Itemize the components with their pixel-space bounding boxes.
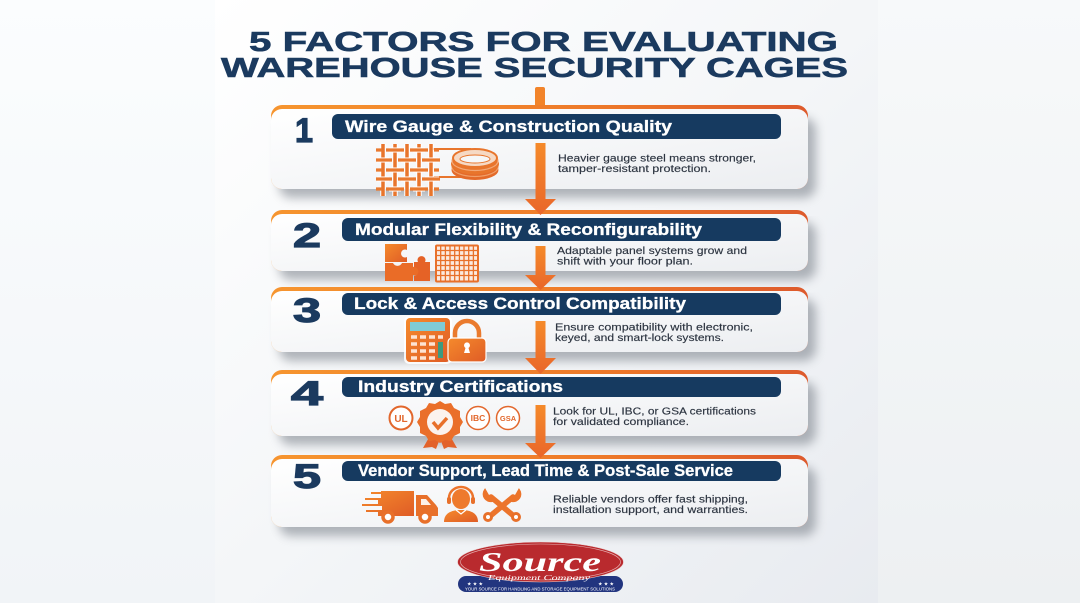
heading bar 4 — [342, 377, 781, 397]
description 2 — [557, 245, 747, 268]
panel: factor 5 — [271, 455, 816, 536]
heading bar 3 — [342, 293, 781, 315]
icon: support agent — [444, 487, 478, 522]
icon: certification badges: GSA — [500, 414, 517, 423]
heading bar 2: Modular Flexibility & Reconfigurability — [355, 221, 703, 239]
description 3 — [555, 322, 753, 344]
arrow 4 to 5 — [525, 405, 556, 458]
description 3: Ensure compatibility with electronic, — [555, 322, 753, 334]
logo: Source Equipment Company: YOUR SOURCE FOR HANDLING AND STORAGE EQUIPMENT SOLUTIONS — [465, 586, 615, 592]
number 1: 1 — [295, 112, 313, 150]
number 2: 2 — [293, 217, 321, 255]
heading bar 1: Wire Gauge & Construction Quality — [345, 118, 673, 136]
top connector — [535, 87, 545, 107]
description 1 — [558, 152, 756, 175]
description 2: Adaptable panel systems grow and — [557, 245, 747, 257]
panel: factor 4 — [271, 370, 816, 449]
description 1: tamper-resistant protection. — [558, 163, 711, 175]
title: 5 FACTORS FOR EVALUATING — [249, 26, 838, 57]
icon: certification badges — [390, 401, 520, 449]
description 4: for validated compliance. — [553, 416, 689, 428]
icon: wire mesh and coil — [376, 144, 498, 196]
description 4: Look for UL, IBC, or GSA certifications — [553, 406, 756, 418]
icon: delivery truck — [362, 491, 438, 522]
description 3: keyed, and smart-lock systems. — [555, 332, 724, 344]
icon: keypad and padlock — [404, 316, 486, 364]
logo: Source Equipment Company: Source — [479, 547, 601, 577]
title — [221, 26, 848, 83]
logo: Source Equipment Company: ★★★ — [598, 582, 615, 588]
icon: puzzle and grid panel — [385, 244, 478, 282]
heading bar 2 — [342, 218, 781, 241]
number 4: 4 — [291, 375, 323, 413]
panel: factor 2 — [271, 210, 816, 282]
title: WAREHOUSE SECURITY CAGES — [221, 52, 848, 83]
description 5: Reliable vendors offer fast shipping, — [553, 494, 748, 506]
arrow 3 to 4 — [525, 321, 556, 374]
icon: wrench and screwdriver — [484, 490, 520, 520]
logo: Source Equipment Company: Equipment Company — [486, 573, 591, 582]
description 1: Heavier gauge steel means stronger, — [558, 152, 756, 164]
logo: Source Equipment Company: ★★★ — [467, 582, 484, 588]
description 4 — [553, 406, 756, 428]
number 3: 3 — [293, 292, 321, 330]
heading bar 3: Lock & Access Control Compatibility — [354, 295, 687, 313]
logo: Source Equipment Company — [458, 542, 624, 592]
description 2: shift with your floor plan. — [557, 256, 693, 268]
heading bar 4: Industry Certifications — [358, 378, 563, 396]
icon: certification badges: UL — [394, 414, 408, 425]
heading bar 5: Vendor Support, Lead Time & Post-Sale Service — [358, 462, 733, 480]
panel: factor 1 — [271, 105, 816, 198]
number 5: 5 — [293, 458, 321, 496]
arrow 2 to 3 — [525, 246, 556, 290]
panel: factor 3 — [271, 287, 816, 364]
description 5: installation support, and warranties. — [553, 504, 748, 516]
heading bar 1 — [332, 114, 781, 139]
icon: certification badges: IBC — [471, 413, 485, 423]
description 5 — [553, 494, 748, 516]
arrow 1 to 2 — [525, 143, 556, 215]
